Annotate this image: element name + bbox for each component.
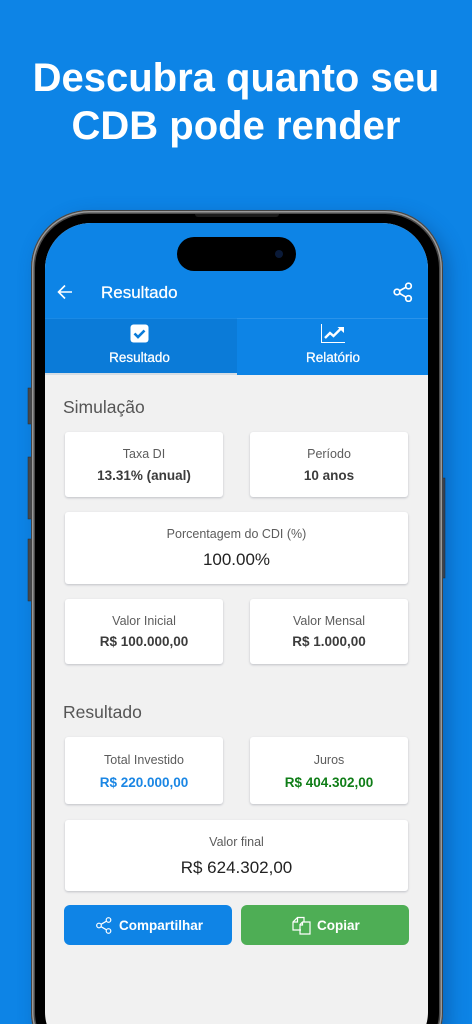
card: Valor final [65,820,408,891]
card: Porcentagem do CDI [65,512,408,584]
card: Valor final: R$ 624.302,00 [181,858,292,877]
card: Porcentagem do CDI: 100.00% [203,550,270,569]
card: Valor final: Valor final [209,835,264,849]
title: Descubra quanto seu [33,56,439,100]
tab: Resultado background [45,318,237,373]
tab label: Resultado: Resultado [109,350,170,365]
app header [45,223,428,318]
card: Valor Inicial: R$ 100.000,00 [100,634,188,649]
icon: camera [275,250,283,258]
dynamic island [177,237,296,271]
phone frame [31,210,443,1024]
title: CDB pode render [72,104,400,148]
card: Valor Inicial [65,599,223,664]
card: Valor Inicial: Valor Inicial [112,614,176,628]
icon: back arrow [58,284,72,300]
card: Valor Mensal: Valor Mensal [293,614,365,628]
card: Total Investido: Total Investido [104,753,184,767]
tab: Relatorio background [237,318,428,375]
title [33,56,439,148]
card: Juros: R$ 404.302,00 [285,775,373,790]
button: Compartilhar: Compartilhar [119,918,203,933]
icon: share [96,917,112,934]
card: Total Investido: R$ 220.000,00 [100,775,188,790]
card: Taxa DI: 13.31% (anual) [97,468,191,483]
card: Juros [250,737,408,804]
tab indicator [45,373,237,375]
card: Juros: Juros [314,753,344,767]
heading: Simulacao: Simulação [63,397,145,417]
button: Copiar: Copiar [317,918,360,933]
card: Taxa DI [65,432,223,497]
card: Total Investido [65,737,223,804]
heading: Resultado: Resultado [63,702,142,722]
icon: line chart [321,324,345,343]
app bar title: Resultado [101,283,178,302]
speaker [195,214,279,217]
card: Periodo: 10 anos [304,468,354,483]
card: Valor Mensal: R$ 1.000,00 [292,634,366,649]
icon: copy [292,916,311,935]
card: Porcentagem do CDI: Porcentagem do CDI (%) [167,527,306,541]
card: Valor Mensal [250,599,408,664]
icon: checkbox [130,324,148,342]
card: Taxa DI: Taxa DI [123,447,165,461]
tab label: Relatorio: Relatório [306,350,360,365]
phone screen [45,223,428,1024]
button: Compartilhar [64,905,232,945]
button: Copiar [241,905,409,945]
icon: share [393,282,412,302]
card: Periodo: Período [307,447,351,461]
card: Periodo [250,432,408,497]
